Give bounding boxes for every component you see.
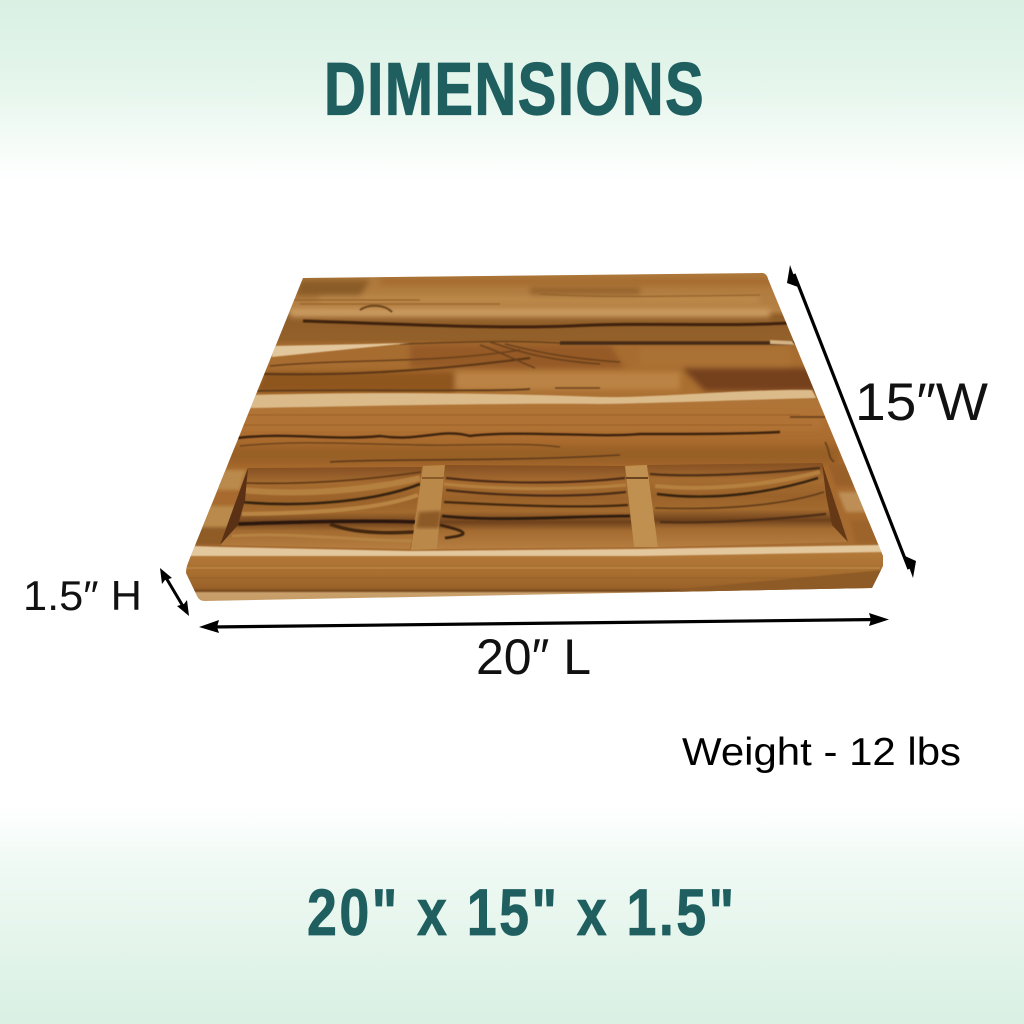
label: 1.5 in H: 1.5″ H xyxy=(23,572,142,619)
cutting board photo xyxy=(180,270,890,602)
board front edge xyxy=(186,552,883,602)
bottom dimensions summary: 20" x 15" x 1.5" xyxy=(307,876,737,949)
title: DIMENSIONS xyxy=(324,49,705,131)
tray divider 1 xyxy=(411,465,445,550)
label: 15 in W: 15″W xyxy=(855,373,988,432)
board top face xyxy=(180,270,890,560)
tray 1 xyxy=(220,467,422,549)
arrow: height 1.5 in xyxy=(160,568,189,616)
label: weight: Weight - 12 lbs xyxy=(682,731,961,774)
background: bottom gradient xyxy=(0,805,1024,1024)
background: top gradient xyxy=(0,0,1024,182)
arrow: length 20 in xyxy=(199,613,889,633)
left and right rail grain xyxy=(192,464,882,545)
tray divider 2 xyxy=(625,465,658,547)
light wood streaks xyxy=(249,340,816,408)
arrow: width 15 in xyxy=(787,265,916,578)
tray 3 xyxy=(647,463,848,547)
tray 2 xyxy=(437,465,634,549)
light wood strip along front xyxy=(190,545,884,556)
label: 20 in L: 20″ L xyxy=(476,629,591,685)
